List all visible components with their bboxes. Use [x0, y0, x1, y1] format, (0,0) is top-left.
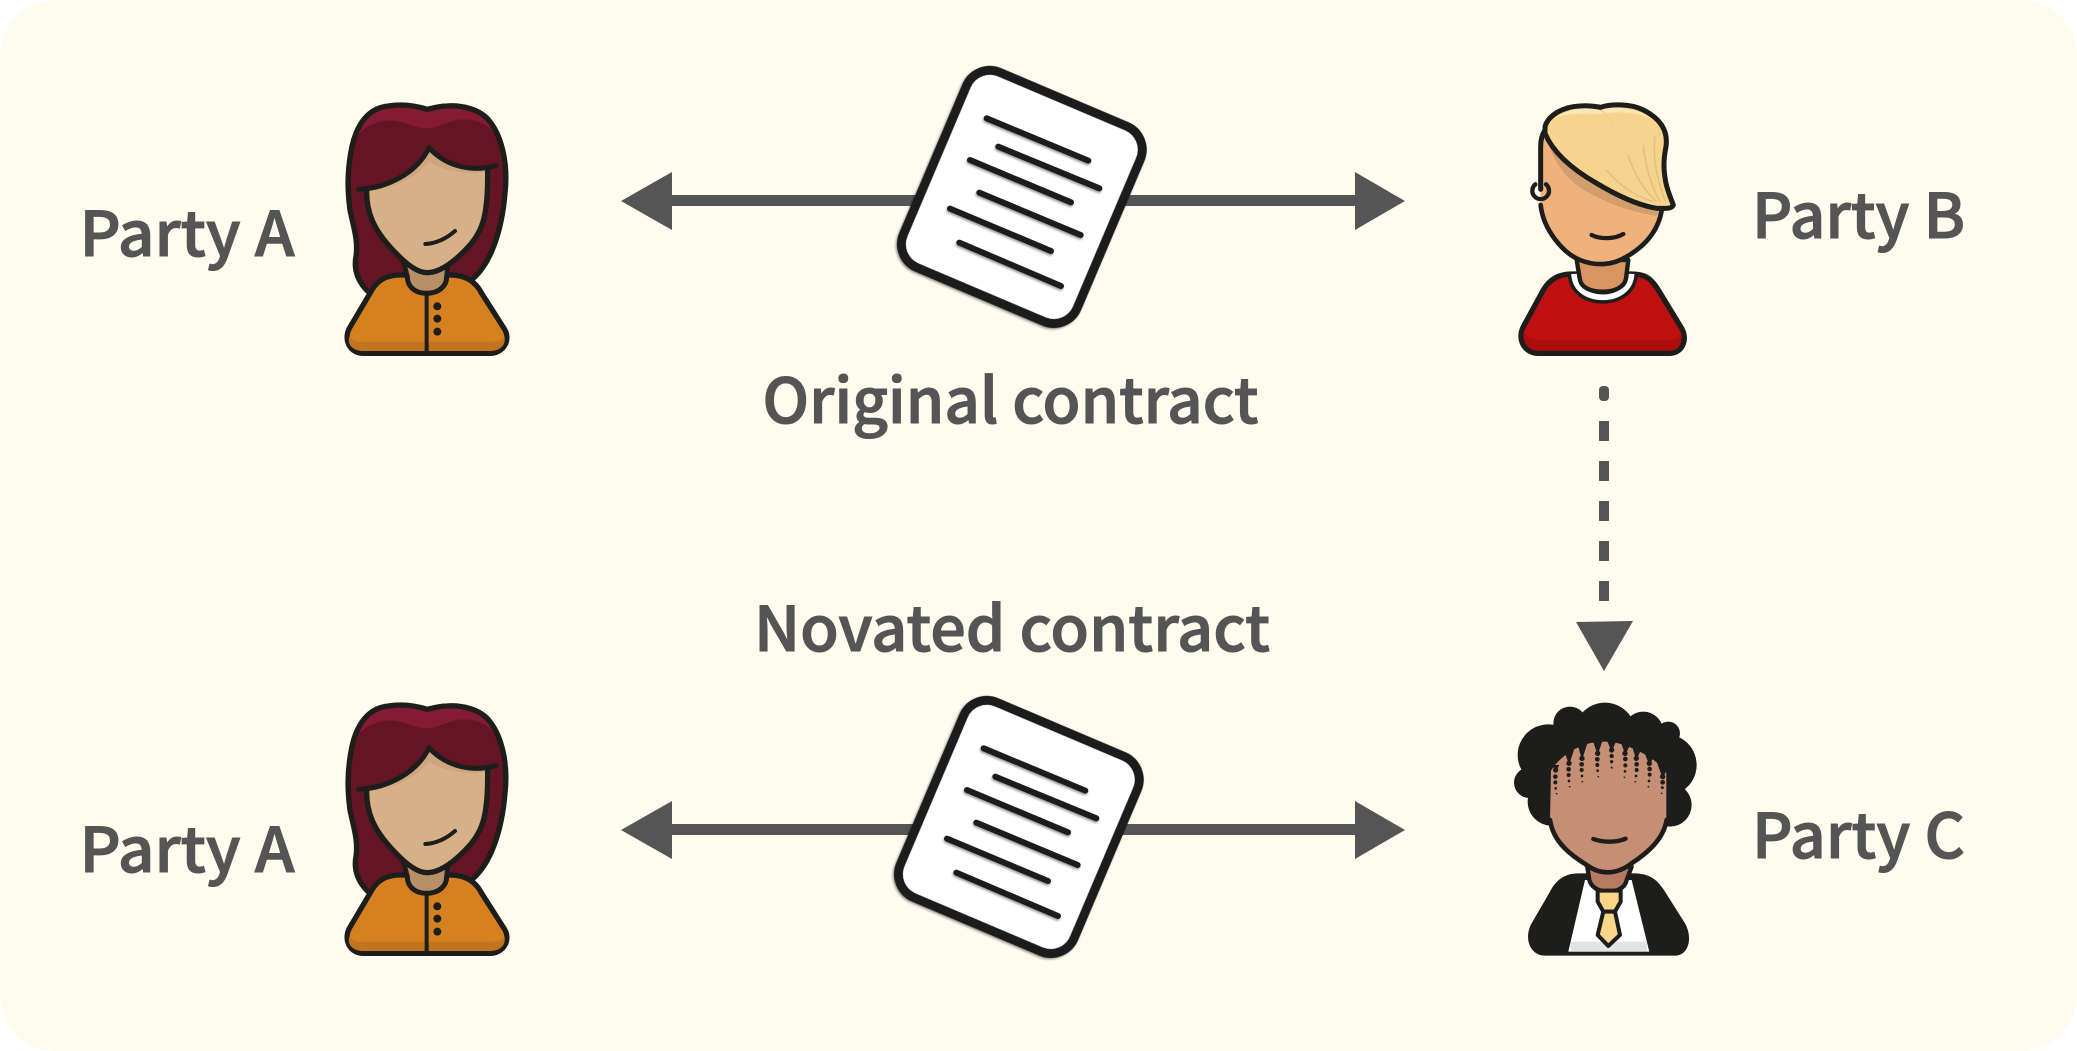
label: Party C: Party C	[1752, 786, 1965, 876]
icon: Party B person	[1521, 105, 1684, 353]
label: Party A top: Party A	[80, 184, 295, 274]
label: Original contract: Original contract	[762, 351, 1258, 441]
arrow: original contract	[621, 172, 1405, 230]
icon: Party C person	[1514, 703, 1697, 956]
arrow: dashed transfer from Party B to Party C	[1576, 386, 1633, 671]
icon: original contract document	[894, 63, 1150, 331]
label: Party B: Party B	[1752, 166, 1965, 256]
arrow: novated contract	[621, 801, 1405, 859]
icon: Party A person (top)	[347, 103, 507, 353]
label: Novated contract: Novated contract	[754, 579, 1270, 669]
icon: Party A person (bottom)	[347, 703, 507, 953]
label: Party A bottom: Party A	[80, 800, 295, 890]
icon: novated contract document	[891, 693, 1147, 961]
